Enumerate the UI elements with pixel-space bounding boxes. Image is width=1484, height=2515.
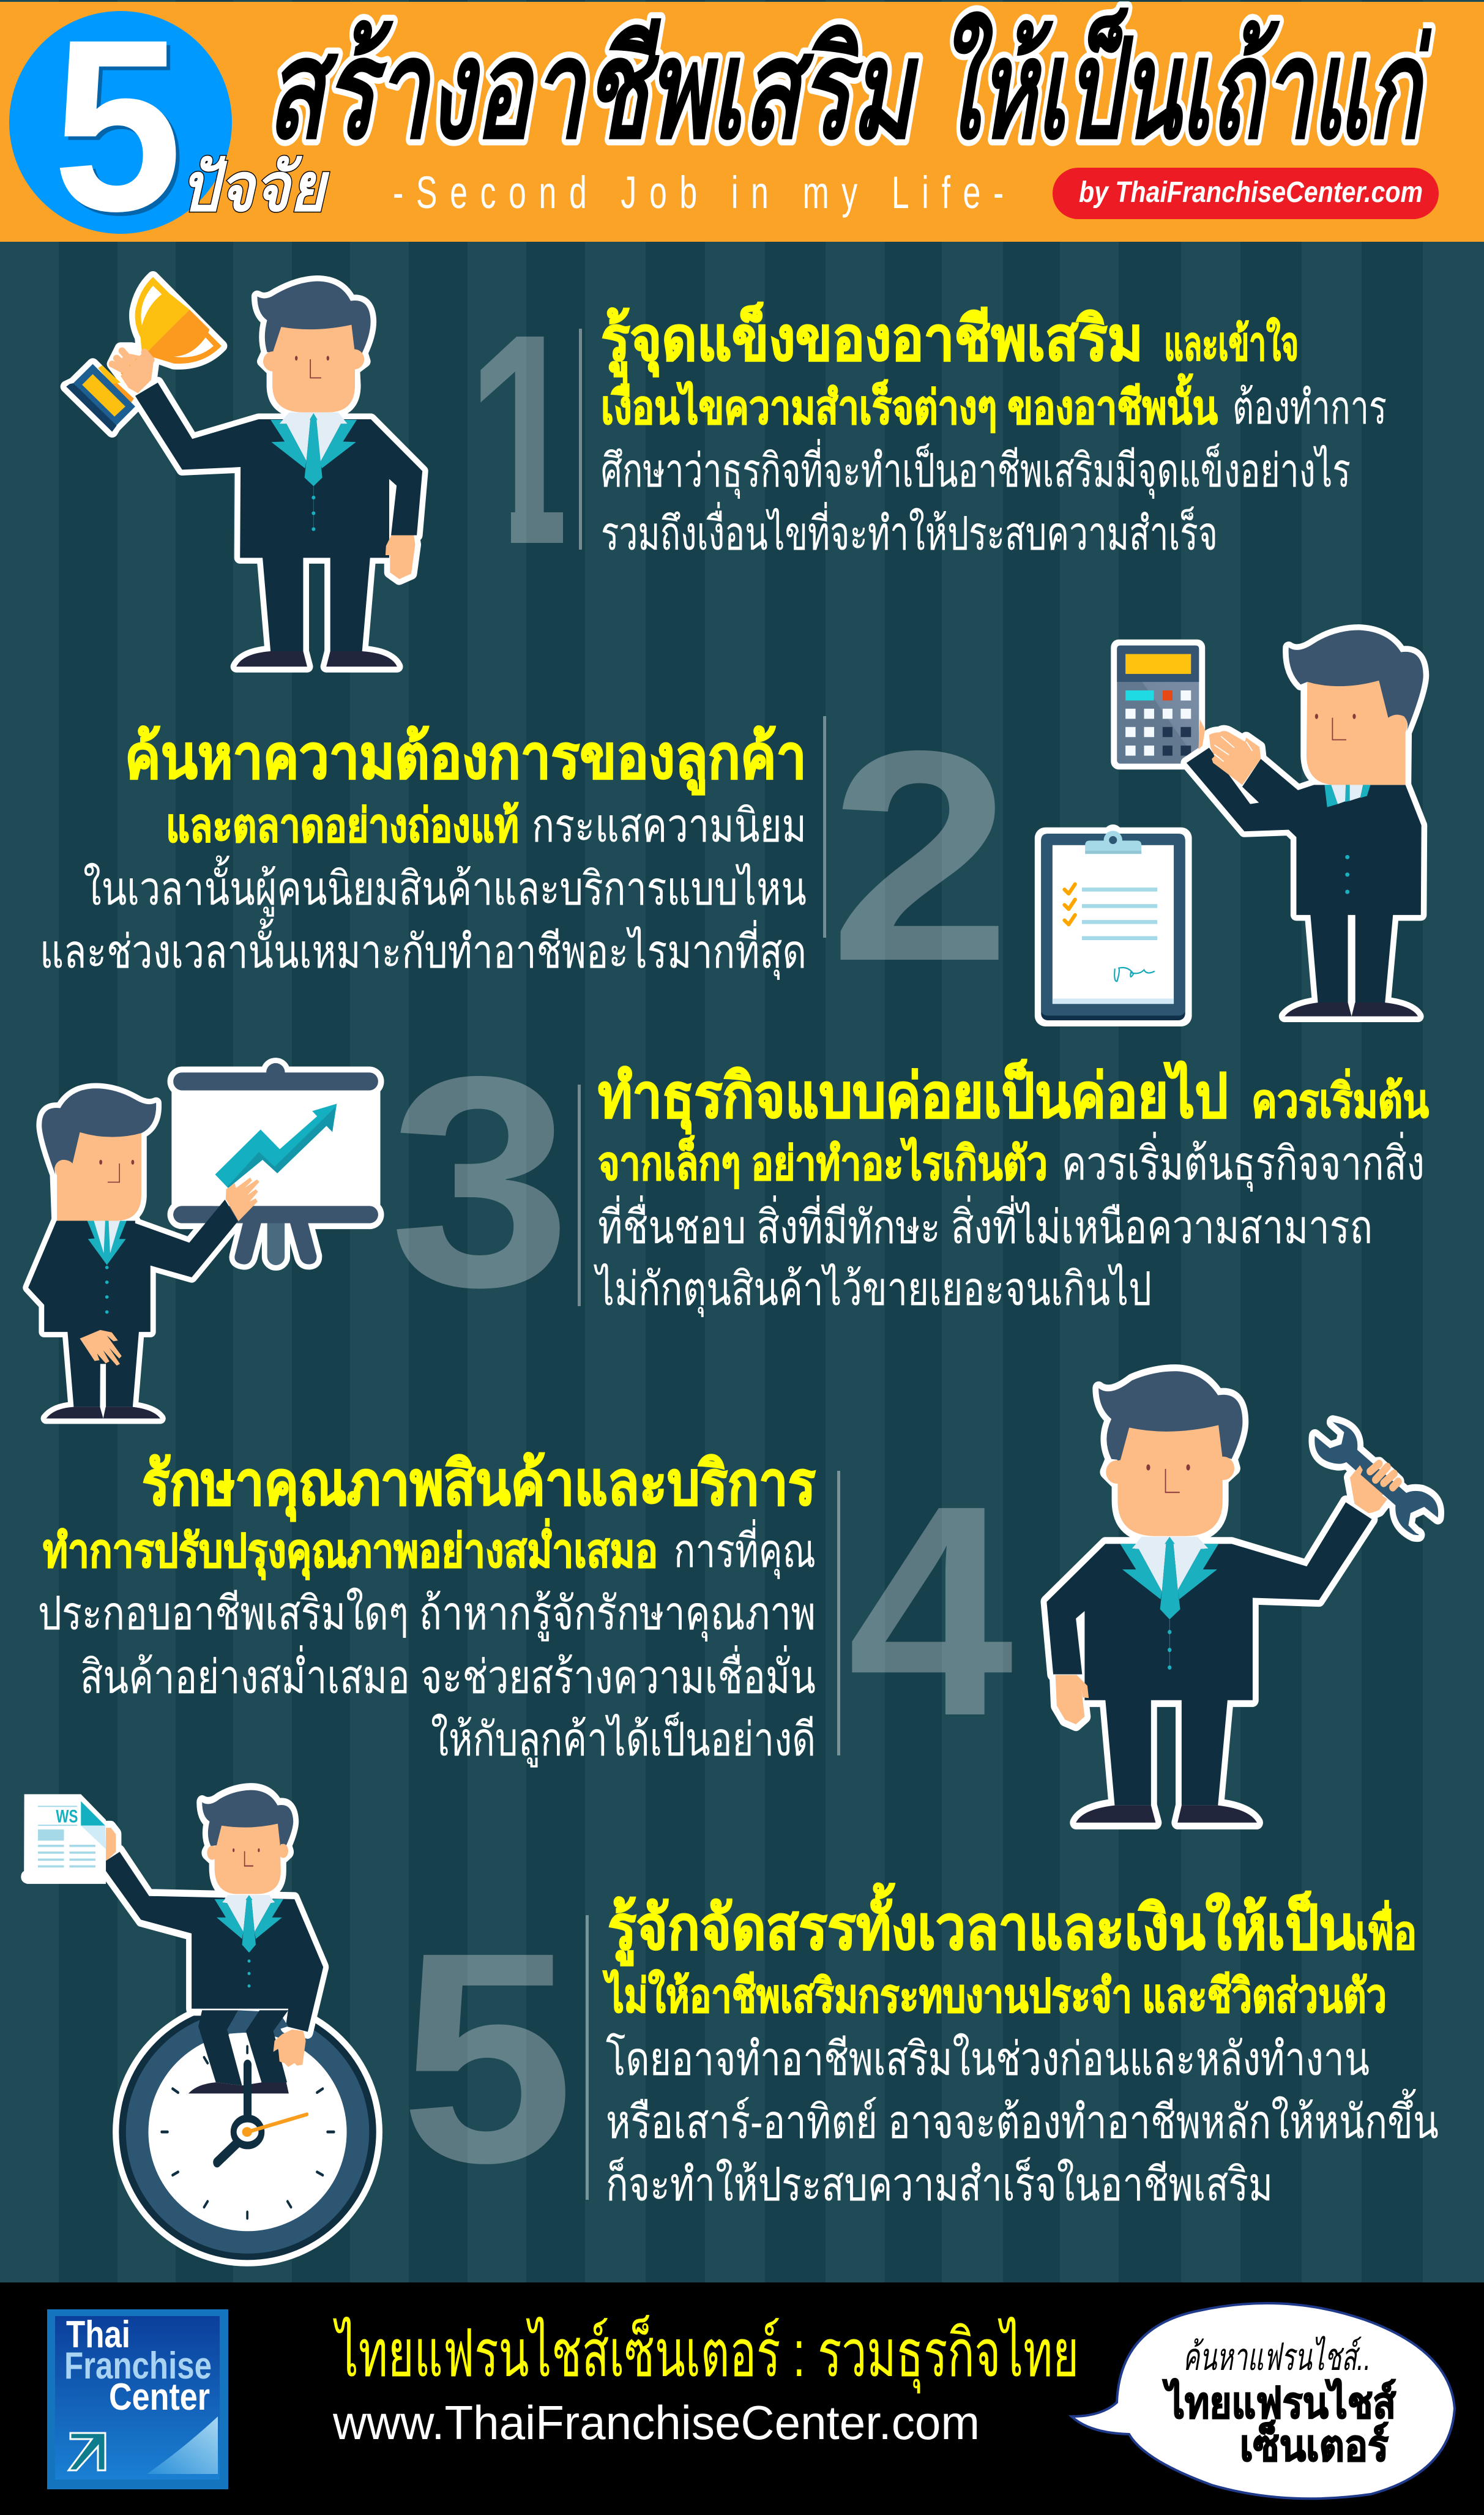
divider and number 3: 3 xyxy=(389,1014,572,1349)
divider and number 1: 1 xyxy=(466,271,583,607)
icon: blue circle with big 5: 5 xyxy=(56,0,186,266)
text block 3: ทำธุรกิจแบบค่อยเป็นค่อยไป xyxy=(598,1059,1228,1134)
text block 2: กระแสความนิยม xyxy=(532,800,807,852)
speech bubble: ไทยแฟรนไชส์ xyxy=(1162,2378,1396,2427)
text block 2: และช่วงเวลานั้นเหมาะกับทำอาชีพอะไรมากที่สุด xyxy=(40,918,807,980)
icon: document xyxy=(21,1794,106,1884)
illustration: man with calculator and clipboard xyxy=(1035,630,1423,1026)
text block 4 xyxy=(38,1449,816,1768)
text block 5 xyxy=(603,1883,1439,2211)
speech bubble xyxy=(1072,2303,1455,2498)
text block 4: ประกอบอาชีพเสริมใดๆ ถ้าหากรู้จักรักษาคุณภาพ xyxy=(38,1587,816,1642)
text block 3 xyxy=(593,1059,1429,1317)
text block 4: รักษาคุณภาพสินค้าและบริการ xyxy=(142,1449,816,1522)
text block 5: เพื่อ xyxy=(1355,1900,1417,1959)
illustration: man sitting on clock xyxy=(21,1790,382,2266)
icon: clock xyxy=(113,1997,382,2266)
divider and number 2: 2 xyxy=(829,688,1012,1023)
illustration: man with wrench xyxy=(1046,1371,1438,1823)
divider and number 1 xyxy=(480,329,582,550)
text block 2: ค้นหาความต้องการของลูกค้า xyxy=(125,723,807,795)
credit pill: by ThaiFranchiseCenter.com xyxy=(1079,176,1423,209)
illustration: man with trophy xyxy=(66,277,422,667)
logo: Thai Franchise Center: Thai xyxy=(66,2314,130,2356)
text block 1: ต้องทำการ xyxy=(1232,382,1387,434)
icon: document: WS xyxy=(56,1806,78,1826)
icon: blue circle with big 5 xyxy=(9,0,232,266)
logo: Thai Franchise Center xyxy=(47,2309,228,2489)
logo: Thai Franchise Center: Center xyxy=(109,2376,210,2418)
subtitle: -Second Job in my Life- xyxy=(393,167,1004,218)
icon: wrench xyxy=(1314,1422,1438,1535)
subheading: ปัจจัย: ปัจจัย xyxy=(181,150,330,225)
text block 2: ในเวลานั้นผู้คนนิยมสินค้าและบริการแบบไหน xyxy=(83,855,807,917)
text block 1 xyxy=(601,302,1387,560)
speech bubble: เซ็นเตอร์ xyxy=(1240,2420,1389,2470)
icon: presentation board xyxy=(168,1058,384,1229)
icon: clipboard xyxy=(1035,824,1192,1026)
text block 1: และเข้าใจ xyxy=(1164,317,1299,370)
speech bubble: ค้นหาแฟรนไชส์.. xyxy=(1183,2336,1371,2379)
text block 4: สินค้าอย่างสม่ำเสมอ จะช่วยสร้างความเชื่อมั่น xyxy=(80,1645,816,1703)
logo: Thai Franchise Center: Franchise xyxy=(64,2345,212,2387)
text block 2: และตลาดอย่างถ่องแท้ xyxy=(166,800,519,852)
text block 1: รู้จุดแข็งของอาชีพเสริม xyxy=(601,302,1143,377)
text block 1: เงื่อนไขความสำเร็จต่างๆ ของอาชีพนั้น xyxy=(601,373,1218,434)
text block 3: ไม่กักตุนสินค้าไว้ขายเยอะจนเกินไป xyxy=(593,1263,1152,1317)
text block 5: รู้จักจัดสรรทั้งเวลาและเงินให้เป็น xyxy=(608,1883,1355,1966)
text block 2 xyxy=(40,723,807,980)
text block 1: รวมถึงเงื่อนไขที่จะทำให้ประสบความสำเร็จ xyxy=(601,502,1218,560)
text block 3: ควรเริ่มต้น xyxy=(1251,1068,1429,1127)
credit pill xyxy=(1053,168,1439,219)
text block 4: การที่คุณ xyxy=(674,1519,816,1579)
icon: calculator xyxy=(1111,640,1205,769)
footer xyxy=(0,2282,1484,2515)
divider and number 5: 5 xyxy=(400,1889,574,2225)
divider and number 4: 4 xyxy=(848,1443,1015,1778)
text block 4: ให้กับลูกค้าได้เป็นอย่างดี xyxy=(431,1712,816,1768)
header banner xyxy=(0,0,1484,266)
title: สร้างอาชีพเสริม xyxy=(267,12,919,166)
text block 5: ก็จะทำให้ประสบความสำเร็จในอาชีพเสริม xyxy=(606,2157,1273,2211)
text block 3: จากเล็กๆ อย่าทำอะไรเกินตัว xyxy=(598,1135,1048,1190)
footer heading: ไทยแฟรนไชส์เซ็นเตอร์ : รวมธุรกิจไทย xyxy=(333,2314,1079,2394)
website url: www.ThaiFranchiseCenter.com xyxy=(332,2396,980,2450)
illustration: man presenting chart xyxy=(28,1058,384,1419)
text block 4: ทำการปรับปรุงคุณภาพอย่างสม่ำเสมอ xyxy=(43,1518,658,1580)
icon: trophy xyxy=(66,277,222,432)
